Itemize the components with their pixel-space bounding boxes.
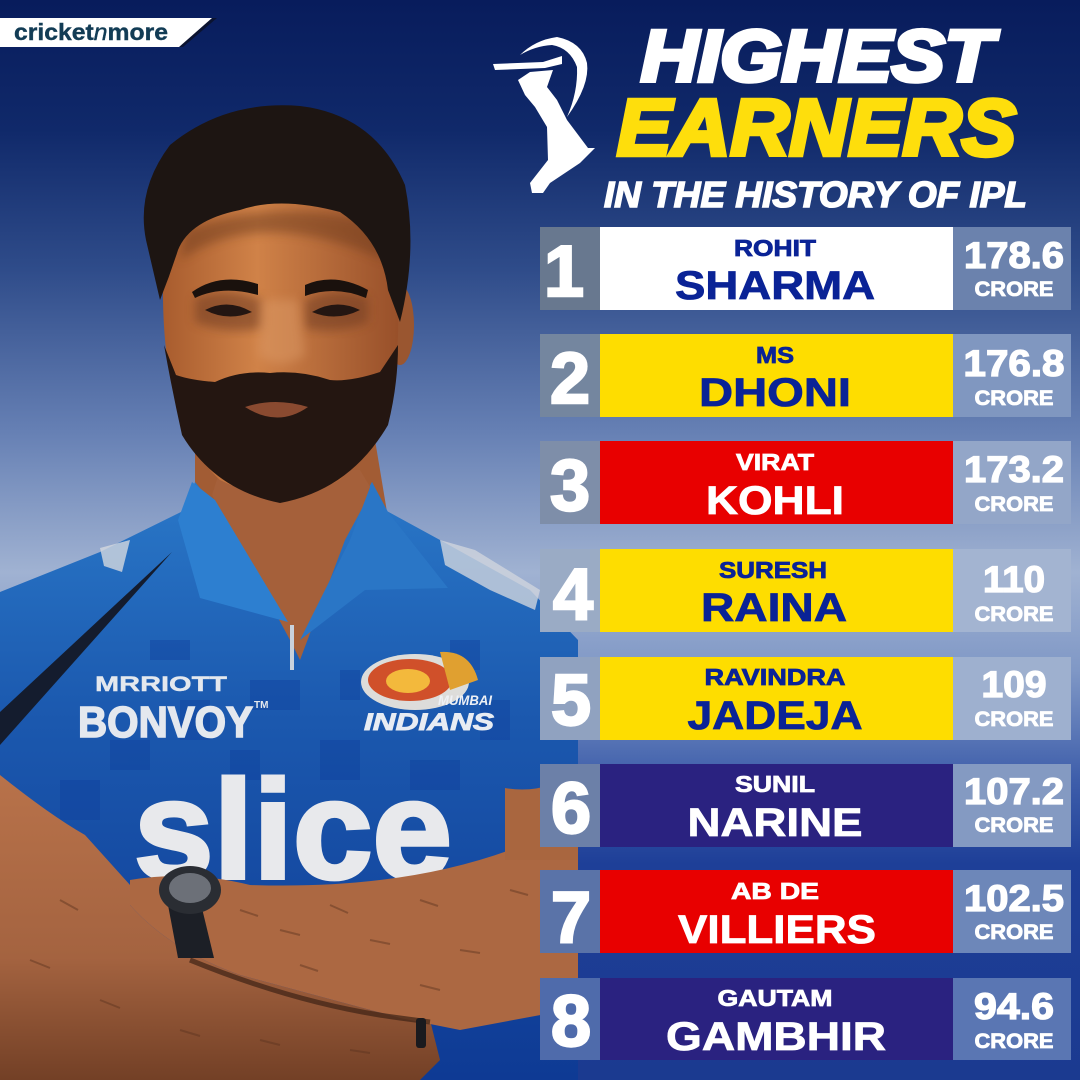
left eyebrow [192, 280, 258, 298]
ranking row 5: JADEJA [688, 694, 862, 738]
right eye [312, 304, 360, 317]
jersey body [0, 482, 578, 1080]
arm hair [30, 890, 528, 1053]
ranking row 6: 107.2 [964, 771, 1064, 812]
ranking row 5: 5 [551, 661, 591, 741]
title line: EARNERS: EARNERS [617, 83, 1016, 172]
ranking row 2: 2 [550, 339, 590, 419]
title line: subtitle: IN THE HISTORY OF IPL [604, 174, 1027, 215]
sponsor: Marriott Bonvoy: MRRIOTT [95, 673, 227, 696]
ranking row 7: 7 [551, 878, 591, 958]
neck [195, 440, 395, 660]
IPL logo: batsman silhouette [493, 37, 595, 193]
zip [290, 625, 294, 670]
wristband [416, 1018, 426, 1048]
ranking row 1: SHARMA [675, 264, 875, 308]
face [163, 190, 398, 495]
ranking row 1: 178.6 [964, 235, 1064, 276]
sponsor: Marriott Bonvoy: TM [254, 700, 268, 711]
sponsor: slice: slice [134, 751, 452, 908]
collar left [178, 482, 288, 622]
ranking row 5: RAVINDRA [704, 664, 846, 690]
shoulder pattern right [440, 540, 540, 610]
ranking row 6 [540, 764, 1071, 849]
mouth [245, 402, 308, 418]
team badge: Mumbai Indians: MUMBAI [438, 692, 493, 708]
ranking row 3: 173.2 [964, 449, 1064, 490]
title [604, 17, 1027, 215]
jersey texture [60, 640, 510, 820]
team badge: Mumbai Indians [361, 652, 494, 736]
ranking row 8 [540, 978, 1071, 1062]
collar right [300, 482, 448, 640]
beard [164, 345, 398, 503]
left eye [205, 304, 252, 317]
arm shadow line [190, 960, 430, 1022]
ranking row 8: GAUTAM [718, 985, 832, 1011]
ranking row 8: CRORE [974, 1030, 1054, 1053]
nose [258, 300, 305, 364]
ranking row 4 [540, 549, 1071, 635]
ranking row 4: SURESH [719, 557, 827, 583]
ranking row 8: GAMBHIR [666, 1015, 886, 1059]
right ear and side of head [386, 285, 414, 365]
brand logo: cricketnmore: cricketnmore [14, 19, 168, 45]
upper forearm [130, 838, 578, 1030]
eye sockets shadow [195, 292, 368, 330]
ranking row 3: VIRAT [736, 449, 814, 475]
ranking row 2 [540, 334, 1071, 419]
ranking row 1: ROHIT [734, 235, 816, 261]
ranking row 4: RAINA [701, 586, 847, 630]
ranking row 3: KOHLI [706, 479, 844, 523]
ranking row 8: 8 [551, 982, 591, 1062]
player portrait: Rohit Sharma [0, 105, 578, 1080]
ranking row 8: 94.6 [974, 986, 1054, 1027]
ranking row 3: 3 [550, 446, 590, 526]
forehead shadow [180, 211, 385, 260]
right elbow [505, 770, 578, 860]
ranking row 5: CRORE [974, 708, 1054, 731]
ranking row 2: MS [756, 342, 794, 368]
ranking row 3: CRORE [974, 493, 1054, 516]
ranking row 1: CRORE [974, 278, 1054, 301]
bat [493, 56, 562, 70]
open collar and chest [212, 470, 372, 660]
ranking row 6: 6 [551, 769, 591, 849]
ranking row 5 [540, 657, 1071, 741]
team badge: Mumbai Indians: INDIANS [364, 709, 494, 736]
ranking row 2: DHONI [699, 371, 851, 415]
ranking row 7: AB DE [731, 878, 819, 904]
brand logo: cricketnmore [0, 18, 217, 47]
sponsor: Marriott Bonvoy [78, 673, 268, 747]
swing arc [520, 37, 587, 117]
ranking row 4: CRORE [974, 603, 1054, 626]
ranking row 6: CRORE [974, 814, 1054, 837]
dark diagonal slash [0, 552, 172, 745]
ranking row 7: 102.5 [964, 878, 1064, 919]
ranking row 7: VILLIERS [678, 908, 876, 952]
ranking row 2: CRORE [974, 387, 1054, 410]
ranking row 1: 1 [544, 232, 584, 312]
batsman body [518, 70, 595, 193]
left arm and lower forearm [0, 775, 440, 1080]
ranking row 4: 110 [983, 559, 1045, 600]
ranking row 5: 109 [982, 664, 1046, 705]
ranking row 6: SUNIL [735, 771, 815, 797]
right eyebrow [305, 280, 368, 298]
hair [144, 105, 410, 322]
shoulder pattern left [100, 540, 130, 572]
wrist watch [159, 866, 221, 958]
sponsor: Marriott Bonvoy: BONVOY [78, 698, 253, 747]
ranking row 3 [540, 441, 1071, 526]
ranking row 2: 176.8 [964, 343, 1064, 384]
ranking row 7 [540, 870, 1071, 958]
ranking row 1 [540, 227, 1071, 312]
ranking row 7: CRORE [974, 921, 1054, 944]
ranking row 4: 4 [553, 555, 593, 635]
ranking row 6: NARINE [688, 801, 862, 845]
title line: HIGHEST: HIGHEST [641, 17, 1000, 97]
